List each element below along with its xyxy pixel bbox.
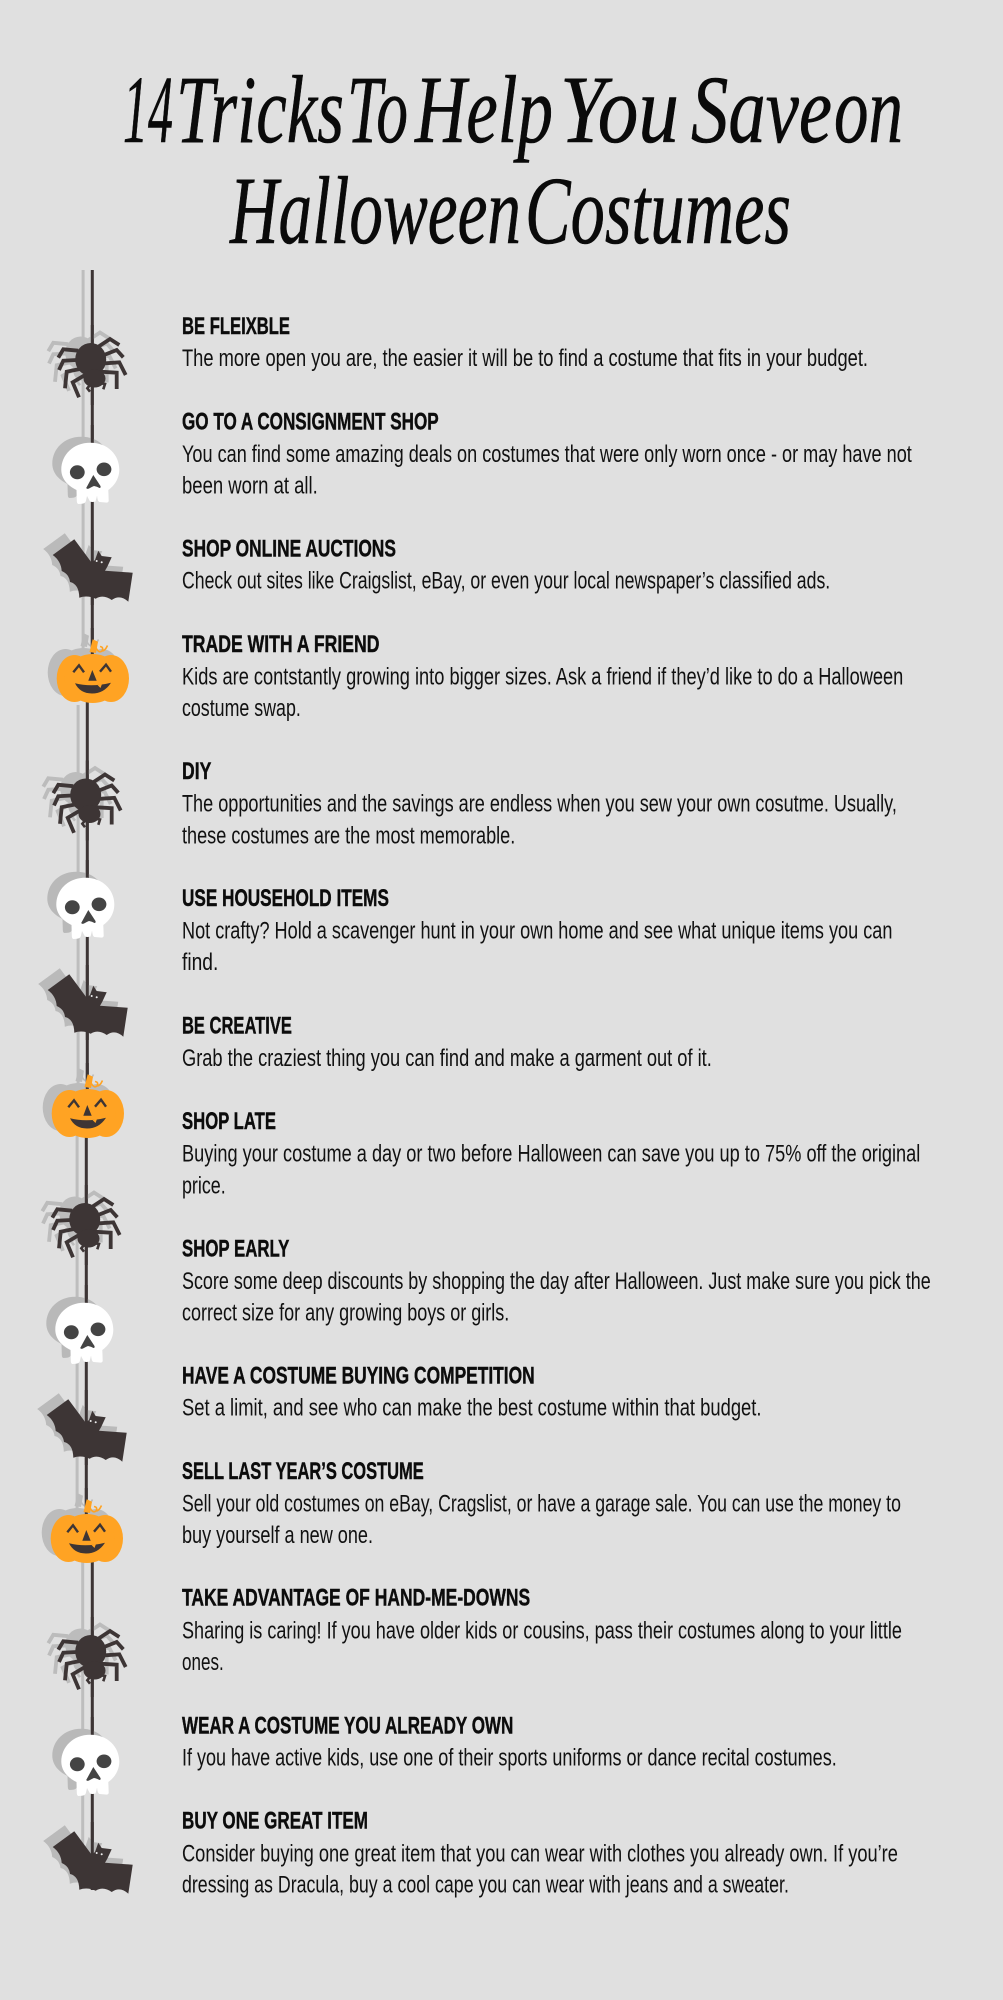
dark string [85, 270, 94, 1890]
heading: BE FLEIXBLE [182, 313, 290, 340]
icon: pumpkin 1 [48, 628, 129, 703]
heading: BUY ONE GREAT ITEM [182, 1808, 368, 1835]
heading: TRADE WITH A FRIEND [182, 631, 380, 658]
body text: buy yourself a new one. [182, 1522, 373, 1549]
title: You [560, 56, 679, 163]
icon: skull 2 [47, 860, 114, 939]
title: Help [414, 56, 553, 163]
body text: correct size for any growing boys or girls. [182, 1300, 509, 1327]
title: on [834, 56, 903, 163]
body text [182, 790, 897, 849]
body text: find. [182, 949, 218, 976]
heading: SELL LAST YEAR’S COSTUME [182, 1458, 424, 1485]
body text [182, 1140, 920, 1199]
tip 8: shop late [182, 1108, 920, 1199]
icon: bat 2 [38, 965, 128, 1040]
icon: bat 3 [37, 1390, 127, 1465]
icon: spider 4 [48, 1617, 126, 1697]
title [123, 56, 903, 264]
tip 6: household items [182, 885, 892, 976]
icon: bat 4 [43, 1822, 133, 1894]
heading: WEAR A COSTUME YOU ALREADY OWN [182, 1712, 513, 1739]
body text [182, 1617, 902, 1676]
title: 14 [123, 56, 173, 163]
icon: skull 1 [52, 425, 119, 504]
icon: spider 1 [48, 325, 126, 405]
body text [182, 918, 892, 976]
tip 4: trade with a friend [182, 631, 903, 722]
icon: spider 3 [42, 1185, 120, 1265]
tip 10: competition [182, 1362, 762, 1422]
body text: Set a limit, and see who can make the best costume within that budget. [182, 1395, 762, 1422]
icon: pumpkin 3 [42, 1488, 123, 1563]
icon: skull 4 [52, 1717, 119, 1796]
body text [182, 1840, 898, 1899]
title: Save [691, 56, 832, 163]
heading: USE HOUSEHOLD ITEMS [182, 885, 389, 912]
tip 7: be creative [182, 1013, 712, 1072]
title: To [347, 56, 408, 163]
heading: DIY [182, 758, 211, 785]
tip 5: diy [182, 758, 897, 849]
body text [182, 1490, 901, 1549]
tip 11: sell last year's costume [182, 1458, 901, 1549]
tip 13: wear a costume you own [182, 1712, 837, 1772]
heading: SHOP ONLINE AUCTIONS [182, 536, 396, 563]
tip 2: consignment shop [182, 408, 912, 500]
heading: TAKE ADVANTAGE OF HAND-ME-DOWNS [182, 1585, 530, 1612]
title: Halloween [229, 157, 521, 264]
heading: BE CREATIVE [182, 1013, 292, 1040]
title: Costumes [525, 157, 791, 264]
tip 9: shop early [182, 1236, 931, 1327]
icon: skull 3 [46, 1285, 113, 1364]
tip 3: online auctions [182, 536, 830, 595]
heading: SHOP EARLY [182, 1236, 289, 1263]
heading: GO TO A CONSIGNMENT SHOP [182, 408, 439, 435]
heading: SHOP LATE [182, 1108, 276, 1135]
body text: costume swap. [182, 695, 301, 722]
body text [182, 441, 912, 500]
title: Tricks [176, 56, 344, 163]
icon: pumpkin 2 [43, 1063, 124, 1138]
body text [182, 663, 903, 722]
body text: dressing as Dracula, buy a cool cape you can wear with jeans and a sweater. [182, 1872, 789, 1899]
heading: HAVE A COSTUME BUYING COMPETITION [182, 1362, 535, 1389]
gray string shadow [76, 270, 85, 1845]
body text [182, 1268, 931, 1327]
tip 12: hand-me-downs [182, 1585, 902, 1676]
tip 14: buy one great item [182, 1808, 898, 1899]
body text: these costumes are the most memorable. [182, 822, 515, 849]
body text: price. [182, 1172, 226, 1199]
body text: ones. [182, 1649, 224, 1676]
body text: Grab the craziest thing you can find and make a garment out of it. [182, 1045, 712, 1072]
body text: been worn at all. [182, 472, 318, 500]
icon: spider 2 [43, 760, 121, 840]
tip 1: be flexible [182, 313, 868, 372]
icon: bat 1 [43, 530, 133, 605]
